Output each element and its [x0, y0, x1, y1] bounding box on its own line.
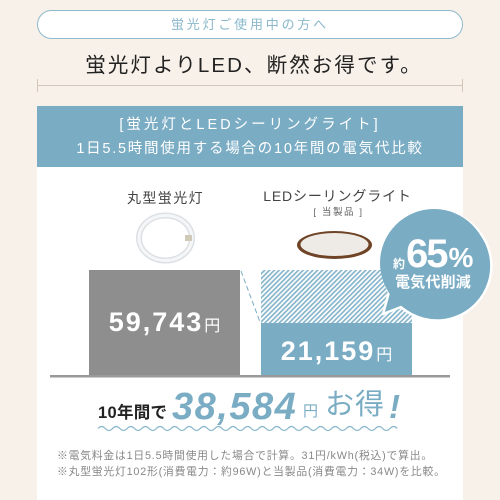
- icon: circular fluorescent tube: [139, 216, 192, 260]
- footnote: ※電気料金は1日5.5時間使用した場合で計算。31円/kWh(税込)で算出。: [57, 450, 433, 462]
- blue header panel: [37, 106, 463, 167]
- exclamation mark: !: [389, 388, 400, 425]
- footnote: ※丸型蛍光灯102形(消費電力：約96W)と当製品(消費電力：34W)を比較。: [57, 466, 446, 478]
- savings prefix: 10年間で: [98, 404, 167, 422]
- label: LED ceiling light: LEDシーリングライト: [263, 188, 412, 204]
- label: own product: [ 当製品 ]: [313, 207, 364, 218]
- savings amount: 38,584: [172, 386, 297, 428]
- header line 1: [蛍光灯とLEDシーリングライト]: [119, 117, 381, 133]
- callout percentage: 65%: [406, 232, 474, 276]
- pill heading: 蛍光灯ご使用中の方へ: [171, 17, 329, 32]
- callout text: 電気代削減: [395, 273, 471, 291]
- callout bubble: [380, 209, 491, 320]
- bracket rule: [37, 79, 463, 92]
- savings suffix: 円: [303, 403, 318, 420]
- header line 2: 1日5.5時間使用する場合の10年間の電気代比較: [76, 141, 424, 157]
- main title: 蛍光灯よりLED、断然お得です。: [85, 54, 423, 77]
- footnote: [57, 450, 446, 478]
- gray bar: [89, 270, 240, 376]
- pill heading: [37, 10, 463, 39]
- dashed connector: [241, 271, 260, 322]
- value: 59,743 yen: 59,743円: [109, 307, 220, 337]
- white panel: [37, 167, 463, 500]
- savings headline: [98, 386, 400, 428]
- label: fluorescent: 丸型蛍光灯: [127, 190, 204, 206]
- icon: LED ceiling light: [297, 231, 372, 259]
- baseline: [50, 375, 450, 378]
- callout prefix: 約: [393, 256, 405, 271]
- value: 21,159 yen: 21,159円: [281, 336, 392, 366]
- wavy underline: [98, 426, 397, 430]
- blue bar: [261, 323, 412, 376]
- hatched saving area: [261, 270, 412, 323]
- savings suffix text: お得: [325, 389, 385, 421]
